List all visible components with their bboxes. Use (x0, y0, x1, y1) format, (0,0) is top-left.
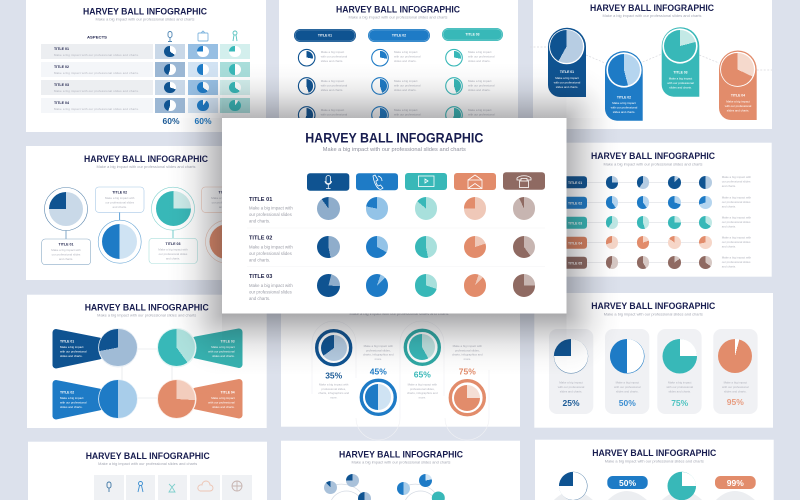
card 95 percent: 95% (727, 397, 744, 407)
card 4: Make a big impact (726, 100, 750, 104)
body copy: with our professional (394, 113, 421, 117)
item 75 percent: Make a big impact with (453, 344, 482, 348)
row labels: TITLE 02 (249, 236, 272, 242)
pill labels: TITLE 03 (568, 221, 582, 225)
card 1 (548, 28, 586, 97)
card 25 percent (549, 329, 593, 414)
row labels: and charts. (249, 257, 270, 262)
card 95 percent: with our professional (722, 385, 749, 389)
card 25 percent: slides and charts. (560, 389, 582, 393)
title pills: TITLE 03 (465, 33, 480, 37)
panel: main harvey ball table (222, 118, 566, 314)
body copy: with our professional (321, 113, 348, 117)
row descriptions: our professional slides (722, 260, 751, 264)
row descriptions (722, 175, 751, 269)
flare 4: slides and charts. (212, 405, 235, 409)
ball and callout 4: Make a big impact with (211, 196, 241, 200)
subheading: Make a big impact with our professional slides and charts (97, 314, 196, 318)
flare 4 (196, 382, 239, 415)
body copy: Make a big impact (394, 50, 417, 54)
subheading: Make a big impact with our professional slides and charts (96, 165, 196, 169)
pill labels: TITLE 01 (568, 181, 582, 185)
subheading: Make a big impact with our professional slides and charts (350, 312, 449, 316)
card 95 percent: Make a big impact (724, 380, 747, 384)
subheading: Make a big impact with our professional slides and charts (96, 18, 195, 22)
flare 4: TITLE 04 (221, 390, 235, 394)
flare 1: slides and charts. (60, 354, 83, 358)
dashed connectors (530, 47, 772, 70)
item 45 percent (361, 344, 395, 414)
body copy: slides and charts. (468, 88, 491, 92)
row labels: and charts. (249, 219, 270, 224)
body copy: with our professional (321, 84, 348, 88)
row labels: our professional slides (249, 289, 292, 294)
percent labels (162, 116, 244, 126)
body copy: Make a big impact (394, 79, 417, 83)
header: microphone icon (307, 173, 349, 191)
row descriptions: and charts. (722, 265, 736, 269)
row labels: Make a big impact with (249, 244, 293, 249)
card 75 percent: Make a big impact (668, 380, 691, 384)
flare 2 (56, 384, 99, 416)
panel: boxed callouts (26, 146, 266, 280)
card 3: Make a big impact (669, 76, 692, 80)
row descriptions: Make a big impact with (722, 195, 751, 199)
flare 2: slides and charts. (60, 405, 83, 409)
flare 2: Make a big impact (60, 396, 83, 400)
subheading: Make a big impact with our professional slides and charts (604, 162, 703, 166)
item 65 percent (405, 330, 439, 399)
ball and callout 2 (95, 187, 144, 263)
gray cones (552, 491, 757, 500)
heading: HARVEY BALL INFOGRAPHIC (591, 151, 715, 161)
body copy: Make a big impact (468, 79, 491, 83)
item 35 percent: more. (330, 395, 338, 399)
row descriptions: Make a big impact with (722, 235, 751, 239)
panel: gray cards (534, 293, 773, 428)
ring balls (298, 49, 462, 123)
header: telephone icon (503, 172, 545, 190)
body copy: Make a big impact (468, 50, 491, 54)
row descriptions: Make a big impact with (722, 175, 751, 179)
heading: HARVEY BALL INFOGRAPHIC (86, 451, 210, 461)
card 2: with our professional (611, 105, 638, 109)
card 50 percent: 50% (619, 398, 636, 408)
card 3: slides and charts. (669, 85, 692, 89)
aspects label: ASPECTS (87, 36, 108, 40)
pill labels: TITLE 04 (568, 241, 582, 245)
card 25 percent: 25% (562, 398, 580, 408)
title pills: TITLE 02 (392, 34, 406, 38)
subheading: Make a big impact with our professional slides and charts (605, 460, 704, 464)
item 45 percent: Make a big impact with (364, 344, 393, 348)
panel: flared labels (27, 295, 267, 428)
card 1: Make a big impact (555, 76, 579, 80)
flare 1 (56, 332, 99, 365)
body copy: Make a big impact (321, 50, 344, 54)
body copy: with our professional (468, 84, 495, 88)
table rows: TITLE 01 (54, 47, 69, 51)
card 1: slides and charts. (556, 85, 578, 89)
item 65 percent: charts, infographics and (407, 391, 438, 395)
subheading: Make a big impact with our professional slides and charts (602, 14, 702, 18)
card 50 percent (605, 329, 649, 414)
subheading: Make a big impact with our professional slides and charts (348, 16, 448, 20)
card 4: TITLE 04 (731, 94, 745, 98)
item 35 percent: 35% (325, 370, 343, 380)
item 65 percent: 65% (414, 370, 431, 380)
row descriptions: our professional slides (722, 200, 751, 204)
card 3: with our professional (667, 81, 694, 85)
flare 3: slides and charts. (212, 354, 235, 358)
table rows: Make a big impact with our professional slides and charts. (54, 53, 139, 57)
body copy: slides and charts. (468, 59, 491, 63)
card 75 percent (657, 329, 702, 414)
harvey balls grid (164, 46, 241, 111)
balls row 2 (606, 196, 712, 209)
card 50 percent: with our professional (614, 385, 641, 389)
ball and callout 1: Make a big impact with (51, 248, 81, 252)
body copy: slides and charts. (321, 88, 343, 92)
item 45 percent: 45% (370, 366, 387, 376)
item 35 percent: charts, infographics and (318, 391, 349, 395)
table rows: TITLE 02 (54, 65, 69, 69)
row descriptions: Make a big impact with (722, 255, 751, 259)
heading: HARVEY BALL INFOGRAPHIC (590, 3, 714, 13)
row descriptions: our professional slides (722, 180, 751, 184)
table rows (41, 44, 250, 113)
ball and callout 2: and charts. (113, 205, 127, 209)
ball and callout 4 (202, 187, 250, 263)
heading: HARVEY BALL INFOGRAPHIC (85, 302, 209, 312)
ball and callout 1 (42, 188, 91, 265)
row labels: our professional slides (249, 251, 292, 256)
card 2: Make a big impact (612, 101, 636, 105)
flare 2: TITLE 02 (60, 390, 74, 394)
ball and callout 2: Make a big impact with (105, 196, 134, 200)
ball and callout 3: TITLE 03 (166, 242, 180, 246)
row dividers (247, 228, 545, 266)
ball and callout 4: and charts. (219, 205, 233, 209)
heading: HARVEY BALL INFOGRAPHIC (336, 5, 460, 15)
row descriptions: and charts. (722, 205, 736, 209)
item 65 percent: more. (419, 395, 426, 399)
body copy: Make a big impact (394, 108, 417, 112)
flare balls (98, 328, 196, 419)
card 75 percent: slides and charts. (668, 389, 691, 393)
icon cells (94, 475, 252, 500)
body copy: with our professional (468, 55, 495, 59)
percent labels: 60% (162, 116, 180, 126)
balls row 1 (606, 176, 712, 189)
pill labels: TITLE 02 (568, 201, 582, 205)
flare 3: with our professional (208, 350, 235, 354)
ball 75 percent (668, 472, 696, 500)
connector lines (122, 349, 172, 398)
header: phone icon (356, 173, 398, 190)
item 35 percent: professional slides, (321, 387, 346, 391)
ball 25 percent (559, 472, 588, 500)
title pills (294, 28, 503, 42)
card 1: TITLE 01 (560, 70, 574, 74)
card 3 (662, 27, 699, 97)
pill 50 percent (607, 476, 648, 489)
subheading: Make a big impact with our professional slides and charts (98, 462, 197, 466)
row descriptions: our professional slides (722, 240, 751, 244)
row 2 balls (317, 236, 535, 258)
card 95 percent (713, 329, 758, 414)
ball and callout 2: our professional slides (105, 200, 135, 204)
title pills: TITLE 01 (318, 34, 332, 38)
item 45 percent: professional slides, (366, 348, 391, 352)
row descriptions: and charts. (722, 245, 736, 249)
connector lines (587, 182, 704, 263)
panel: matrix with pill labels (530, 143, 772, 277)
flare 3 (196, 332, 239, 364)
row labels: Make a big impact with (249, 283, 293, 288)
heading: HARVEY BALL INFOGRAPHIC (592, 448, 717, 458)
subheading: Make a big impact with our professional slides and charts (604, 312, 703, 316)
heading: HARVEY BALL INFOGRAPHIC (305, 130, 483, 146)
body copy: with our professional (394, 55, 421, 59)
body copy: slides and charts. (394, 88, 417, 92)
card 2: slides and charts. (613, 110, 635, 114)
heading: HARVEY BALL INFOGRAPHIC (339, 450, 463, 460)
flare 2: with our professional (60, 401, 87, 405)
card 3: TITLE 03 (673, 71, 688, 75)
card 1: with our professional (554, 80, 581, 84)
flare 1: with our professional (60, 350, 87, 354)
body copy: Make a big impact (468, 108, 491, 112)
ball and callout 3: our professional slides (159, 252, 188, 256)
percent labels: 60% (194, 116, 212, 126)
row descriptions: and charts. (722, 225, 736, 229)
row descriptions: Make a big impact with (722, 215, 751, 219)
row descriptions: our professional slides (722, 220, 751, 224)
card 50 percent: slides and charts. (616, 389, 639, 393)
pill 99 percent: 99% (727, 478, 744, 488)
ball and callout 3 (149, 187, 197, 264)
item 35 percent (317, 331, 351, 399)
row labels (249, 197, 293, 301)
flare 3: Make a big impact (211, 345, 235, 349)
ball and callout 1: TITLE 01 (59, 243, 73, 247)
card 2: TITLE 02 (617, 95, 631, 99)
item 75 percent (450, 344, 484, 415)
panel: stepped cards (530, 0, 772, 129)
balls row 4 (606, 236, 712, 249)
item 45 percent: charts, infographics and (363, 353, 394, 357)
balls row 3 (606, 216, 712, 229)
panel: pills and cones (535, 440, 774, 500)
item 75 percent: professional slides, (455, 348, 480, 352)
balls row 5 (606, 256, 712, 269)
header: video icon (405, 173, 447, 190)
panel: icon table (28, 442, 267, 500)
pill labels: TITLE 05 (568, 261, 582, 265)
card 4 (719, 50, 757, 120)
heading: HARVEY BALL INFOGRAPHIC (83, 6, 207, 16)
body copy: with our professional (321, 55, 348, 59)
body copy: with our professional (468, 113, 495, 117)
flare 1: Make a big impact (60, 345, 83, 349)
ball and callout 2: TITLE 02 (112, 191, 127, 195)
item 65 percent: Make a big impact with (408, 382, 437, 386)
table rows: Make a big impact with our professional slides and charts. (54, 89, 139, 93)
heading: HARVEY BALL INFOGRAPHIC (591, 301, 716, 311)
card 25 percent: with our professional (558, 385, 585, 389)
card outlines (312, 321, 489, 440)
item 75 percent: 75% (459, 366, 476, 376)
flare 4: with our professional (208, 401, 235, 405)
item 75 percent: charts, infographics and (452, 353, 483, 357)
flare 1: TITLE 01 (60, 340, 74, 344)
ball and callout 4: TITLE 04 (219, 191, 233, 195)
ball and callout 3: and charts. (166, 256, 180, 260)
panel: aspects table (26, 0, 266, 132)
row labels: TITLE 03 (249, 274, 272, 280)
card 2 (605, 51, 643, 121)
ball and callout 1: and charts. (59, 257, 73, 261)
card 4: with our professional (725, 104, 752, 108)
row labels: Make a big impact with (249, 206, 293, 211)
orbit arcs (328, 484, 438, 500)
item 45 percent: more. (375, 357, 382, 361)
percent labels: 60% (226, 116, 244, 126)
pill 99 percent (715, 476, 756, 489)
body copy: Make a big impact (321, 108, 344, 112)
ball and callout 4: our professional slides (212, 200, 241, 204)
pill labels (530, 176, 587, 269)
item 75 percent: more. (464, 357, 471, 361)
table rows: TITLE 04 (54, 101, 69, 105)
card 4: slides and charts. (727, 108, 749, 112)
card 50 percent: Make a big impact (616, 380, 639, 384)
icon row (168, 31, 237, 42)
body copy: with our professional (394, 84, 421, 88)
card 75 percent: 75% (671, 398, 689, 408)
panel: title pills columns (279, 0, 518, 132)
table rows: TITLE 03 (54, 83, 69, 87)
heading: HARVEY BALL INFOGRAPHIC (84, 154, 208, 164)
row 1 balls (317, 197, 535, 220)
subheading: Make a big impact with our professional slides and charts (323, 147, 466, 153)
orbit balls (324, 474, 445, 500)
card 25 percent: Make a big impact (559, 380, 583, 384)
subheading: Make a big impact with our professional slides and charts (352, 460, 451, 464)
panel: orbit balls (281, 441, 520, 500)
card 75 percent: with our professional (666, 385, 693, 389)
body copy: slides and charts. (394, 59, 417, 63)
row labels: and charts. (249, 296, 270, 301)
body copy: slides and charts. (321, 59, 343, 63)
row descriptions: and charts. (722, 184, 736, 188)
header: envelope icon (454, 173, 496, 190)
row labels: TITLE 01 (249, 197, 272, 203)
body copy (321, 50, 495, 117)
flare 3: TITLE 03 (221, 340, 235, 344)
pill 50 percent: 50% (619, 478, 636, 488)
panel: ring percentages (281, 290, 520, 440)
item 35 percent: Make a big impact with (319, 382, 348, 386)
table rows: Make a big impact with our professional slides and charts. (54, 107, 139, 111)
ball and callout 3: Make a big impact with (158, 248, 188, 252)
item 65 percent: professional slides, (410, 387, 435, 391)
flare 4: Make a big impact (211, 396, 235, 400)
row 3 balls (317, 274, 535, 297)
ball and callout 1: our professional slides (52, 252, 81, 256)
card 95 percent: slides and charts. (724, 389, 747, 393)
body copy: Make a big impact (321, 79, 344, 83)
row labels: our professional slides (249, 212, 292, 217)
table rows: Make a big impact with our professional slides and charts. (54, 71, 139, 75)
